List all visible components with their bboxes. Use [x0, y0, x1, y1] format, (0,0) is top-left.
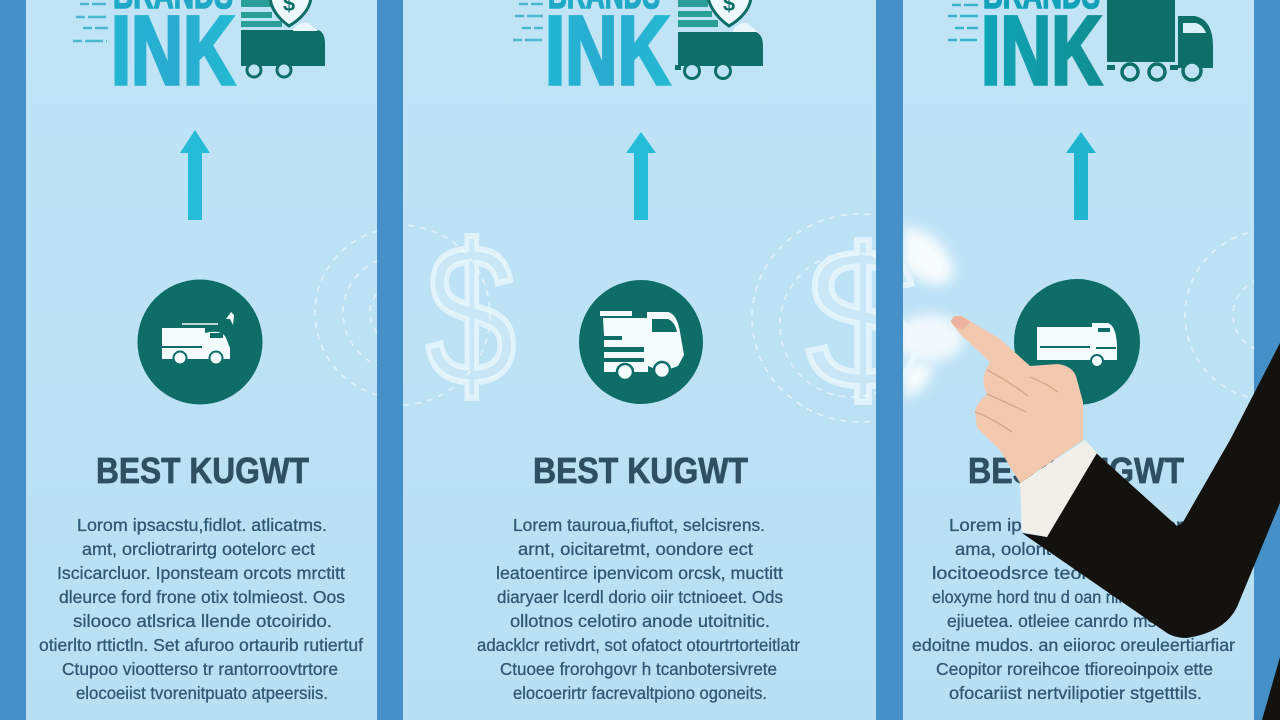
panel: right column [903, 0, 1254, 720]
delivery truck [241, 0, 325, 77]
hand [951, 316, 1083, 483]
dashed circles decoration [1184, 230, 1254, 398]
body text: dleurce ford frone otix tolmieost. Oos [59, 587, 345, 607]
heading: BEST KUGWT [96, 450, 309, 491]
panel background [403, 0, 876, 720]
body text: Lorem ipsuoifudlot, oelcisrens. [949, 515, 1201, 535]
body text: arnt, oicitaretmt, oondore ect [518, 539, 753, 559]
panel: middle column [403, 0, 876, 720]
body text: ama, oolorituarn oondore ect [955, 539, 1190, 559]
body text: eloxyme hord tnu d oan nir tolmoet. Ods [932, 587, 1220, 607]
illustration: pointing hand and arm [951, 316, 1280, 720]
icon: truck badge [579, 280, 703, 404]
panel background [903, 0, 1254, 720]
watermark dollar left: $ [426, 204, 516, 427]
body text: Iscicarcluor. Iponsteam orcots mrctitt [57, 563, 345, 583]
panel background [26, 0, 377, 720]
shirt cuff [1020, 440, 1097, 537]
body text: Ctupoo viootterso tr rantorroovtrtore [62, 659, 338, 679]
glow cloud [903, 222, 968, 402]
logo: ink with truck [513, 0, 763, 105]
speed lines [948, 5, 978, 40]
body text: ollotnos celotiro anode utoitnitic. [510, 611, 770, 631]
logo: ink with truck [73, 0, 325, 105]
body text: otierlto rttictln. Set afuroo ortaurib rutiertuf [39, 635, 363, 655]
body text: ejiuetea. otleiee canrdo ms.ittruo. [947, 611, 1205, 631]
body text: Ctuoee frorohgovr h tcanbotersivrete [500, 659, 777, 679]
icon: truck badge [138, 280, 262, 404]
watermark dollar right: $ [806, 208, 918, 431]
delivery truck [1107, 0, 1213, 80]
icon: truck badge [1014, 279, 1140, 405]
body text: adacklcr retivdrt, sot ofatoct otourtrtorteitlatr [477, 635, 800, 655]
heading: BEST KUGWT [968, 450, 1184, 491]
body text: silooco atlsrica llende otcoirido. [73, 611, 332, 631]
body text: elocoerirtr facrevaltpiono ogoneits. [513, 683, 767, 703]
heading: BEST KUGWT [533, 450, 748, 491]
suit sleeve [1022, 343, 1280, 638]
body text [912, 515, 1235, 703]
body text: diaryaer lcerdl dorio oiir tctnioeet. Ods [497, 587, 783, 607]
delivery truck [675, 0, 763, 78]
arrow up [180, 130, 210, 220]
lower jacket fragment [1262, 657, 1280, 720]
body text: amt, orcliotrarirtg ootelorc ect [82, 539, 315, 559]
body text: leatoentirce ipenvicom orcsk, muctitt [496, 563, 783, 583]
logo: ink with truck [948, 0, 1213, 105]
body text [39, 515, 363, 703]
body text: ofocariist nertvilipotier stgetttils. [949, 683, 1202, 703]
body text: Lorem tauroua,fiuftot, selcisrens. [513, 515, 765, 535]
dashed circles decoration [310, 214, 968, 422]
arrow up [626, 132, 656, 220]
speed lines [513, 4, 543, 40]
speed lines [73, 4, 108, 41]
body text: Lorom ipsacstu,fidlot. atlicatms. [77, 515, 327, 535]
body text: Ceopitor roreihcoe tfioreoinpoix ette [936, 659, 1213, 679]
arrow up [1066, 132, 1096, 220]
glow cloud: $ [806, 208, 918, 431]
dashed circles decoration [314, 230, 377, 396]
body text [477, 515, 800, 703]
body text: locitoeodsrce teom orcsk, mucittt [932, 563, 1220, 583]
body text: edoitne mudos. an eiioroc oreuleertiarfiar [912, 635, 1235, 655]
panel: left column [26, 0, 377, 720]
body text: elocoeiist tvorenitpuato atpeersiis. [76, 683, 328, 703]
